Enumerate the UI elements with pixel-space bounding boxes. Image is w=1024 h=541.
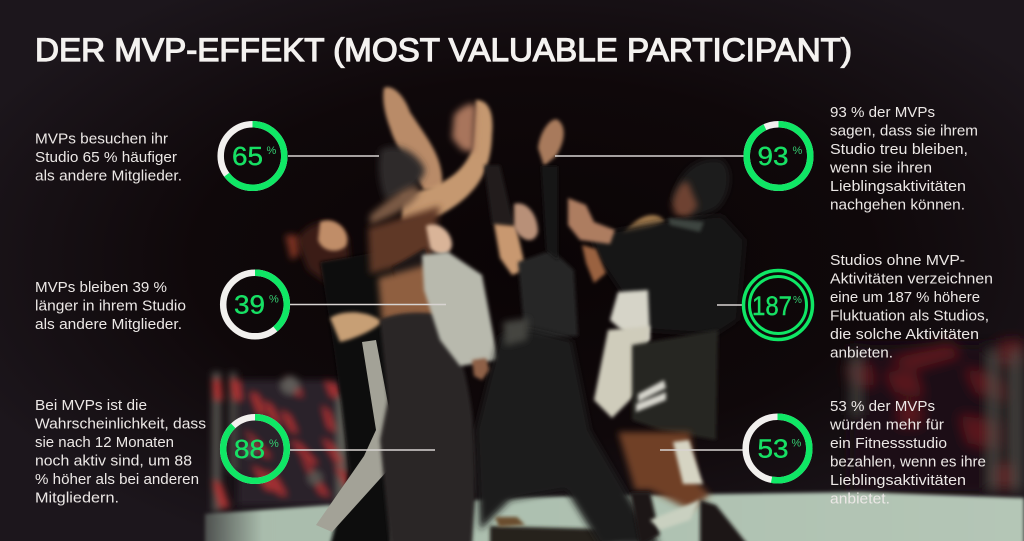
text: 53 % would pay more: ein Fitnessstudio [830, 436, 947, 452]
ring chart: 53 %: % [792, 438, 802, 450]
ring chart: 53 %: 53 [758, 436, 789, 464]
ring chart: 187 %: % [793, 295, 802, 306]
connector line [555, 155, 744, 157]
floor [205, 492, 1024, 541]
ring chart: 88 %: 88 [234, 436, 265, 464]
ring chart: 65 %: 65 [232, 143, 263, 171]
dancer left with striped trousers [285, 220, 400, 541]
text: 88 % more likely: sie nach 12 Monaten [35, 435, 174, 451]
text: 65 % more visits: Studio 65 % häufiger [35, 150, 177, 166]
text: 53 % would pay more: anbietet. [830, 492, 890, 508]
stat: 187 % [717, 253, 993, 362]
text: 53 % would pay more [829, 399, 986, 508]
ring chart: 65 % [221, 124, 284, 188]
text: 187 % higher churn: Studios ohne MVP- [830, 253, 965, 269]
text: 39 % longer: MVPs bleiben 39 % [35, 280, 167, 296]
ring chart: 93 %: % [792, 145, 802, 157]
ring chart: 88 % [223, 417, 287, 481]
text: 88 % more likely: % höher als bei anderen [35, 472, 199, 488]
title: DER MVP-EFFEKT (MOST VALUABLE PARTICIPANT) [35, 32, 852, 68]
ring chart: 39 %: 39 [234, 292, 265, 320]
text: 88 % more likely: noch aktiv sind, um 88 [35, 454, 192, 470]
connector line [717, 304, 742, 306]
text: 65 % more visits [35, 132, 182, 184]
text: 53 % would pay more: 53 % der MVPs [830, 399, 935, 415]
photo: dancers in a gym [205, 87, 1024, 541]
connector line [660, 449, 744, 451]
text: 65 % more visits: als andere Mitglieder. [35, 168, 182, 184]
ring chart: 39 % [223, 273, 287, 336]
stat: 88 % [35, 398, 435, 506]
text: 93 % stay loyal: wenn sie ihren [829, 160, 932, 176]
text: 187 % higher churn: Fluktuation als Studios, [830, 308, 989, 324]
text: 65 % more visits: MVPs besuchen ihr [35, 132, 168, 148]
text: 53 % would pay more: bezahlen, wenn es ihre [830, 454, 986, 470]
connector line [290, 304, 446, 306]
ring chart: 93 %: 93 [758, 143, 789, 171]
dancer in black top, centre [476, 119, 660, 541]
ring chart: 53 % [746, 417, 809, 480]
ring chart: 88 %: % [269, 438, 279, 450]
connector line [290, 449, 435, 451]
ring chart: 65 %: % [266, 145, 276, 157]
text: 93 % stay loyal: Studio treu bleiben, [830, 142, 968, 158]
text: 88 % more likely: Mitgliedern. [35, 490, 119, 506]
connector line [288, 155, 379, 157]
stat: 93 % [555, 105, 978, 214]
text: 187 % higher churn: eine um 187 % höhere [830, 290, 980, 306]
dancer with bare back, raised arms [368, 87, 492, 541]
stat: 53 % [660, 399, 986, 508]
text: 187 % higher churn [830, 253, 993, 362]
ring chart: 39 %: % [269, 294, 279, 306]
text: 93 % stay loyal: 93 % der MVPs [830, 105, 935, 121]
text: 88 % more likely: Wahrscheinlichkeit, dass [35, 416, 206, 432]
ring chart: 93 % [747, 124, 810, 188]
text: 53 % would pay more: würden mehr für [829, 418, 944, 434]
text: 88 % more likely [35, 398, 206, 506]
dancer in black shirt and shorts, right [568, 159, 748, 541]
dancer in white shirt [422, 224, 498, 380]
ring chart: 187 %: 187 [752, 291, 792, 321]
text: 187 % higher churn: Aktivitäten verzeichnen [830, 272, 993, 288]
text: 39 % longer: länger in ihrem Studio [35, 298, 186, 314]
text: 53 % would pay more: Lieblingsaktivitäten [830, 473, 966, 489]
ring chart: 187 % [744, 270, 812, 340]
gym rack left [212, 372, 353, 512]
text: 93 % stay loyal: nachgehen können. [830, 198, 965, 214]
text: 187 % higher churn: die solche Aktivitäten [830, 327, 979, 343]
text: 187 % higher churn: anbieten. [830, 346, 893, 362]
text: 88 % more likely: Bei MVPs ist die [35, 398, 147, 414]
text: 93 % stay loyal [829, 105, 978, 214]
stat: 65 % [35, 124, 379, 188]
text: 93 % stay loyal: sagen, dass sie ihrem [830, 124, 978, 140]
text: 39 % longer: als andere Mitglieder. [35, 317, 182, 333]
text: 93 % stay loyal: Lieblingsaktivitäten [830, 179, 966, 195]
text: 39 % longer [35, 280, 186, 333]
stat: 39 % [35, 273, 446, 336]
gym rack right [845, 340, 1024, 495]
